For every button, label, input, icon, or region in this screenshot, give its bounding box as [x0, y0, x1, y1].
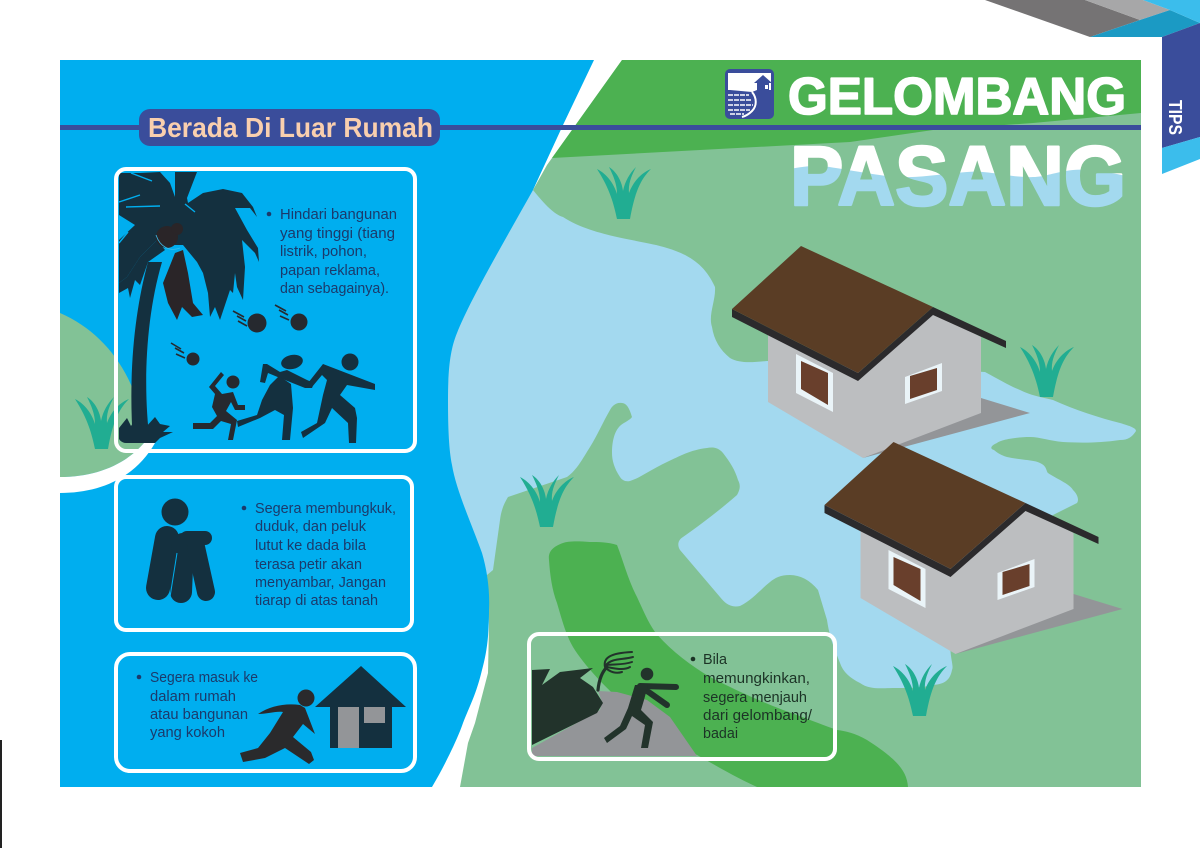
ribbon: top right corner — [985, 0, 1200, 37]
text: move away from waves: dari gelombang/ — [703, 707, 813, 724]
water — [440, 190, 1136, 688]
box outline — [116, 654, 415, 771]
dark green hill — [552, 60, 1141, 158]
text: enter sturdy building: atau bangunan — [150, 706, 248, 723]
text: crouch from lightning: lutut ke dada bila — [255, 537, 367, 554]
house: back — [732, 246, 1030, 458]
icon: tidal wave logo — [725, 69, 774, 119]
box outline — [116, 477, 412, 630]
panel: landscape — [440, 60, 1141, 787]
panel: left blue — [60, 60, 594, 787]
tab label: TIPS — [1165, 100, 1185, 135]
text: move away from waves — [691, 651, 813, 742]
grass: left hill — [75, 397, 129, 449]
text: enter sturdy building: dalam rumah — [150, 688, 236, 705]
icon: house — [315, 666, 406, 748]
text: enter sturdy building: Segera masuk ke — [150, 669, 258, 686]
band — [60, 125, 1141, 130]
text: avoid tall structures: dan sebagainya). — [280, 280, 389, 297]
text: avoid tall structures: papan reklama, — [280, 262, 380, 279]
text: crouch from lightning: Segera membungkuk, — [255, 500, 396, 517]
text: avoid tall structures: listrik, pohon, — [280, 243, 367, 260]
text: move away from waves: segera menjauh — [703, 689, 807, 706]
heading: berada di luar rumah: Berada Di Luar Rumah — [148, 112, 433, 143]
text: move away from waves: Bila — [703, 651, 728, 668]
grass: top — [597, 167, 651, 219]
text: crouch from lightning — [242, 500, 396, 609]
panel: enter sturdy building — [116, 654, 415, 771]
icon: bent palm — [598, 652, 633, 690]
grass: right — [1020, 345, 1074, 397]
box outline — [116, 169, 415, 451]
left hill — [60, 313, 155, 493]
icon: running person — [240, 690, 315, 764]
panel: avoid tall structures — [116, 169, 415, 451]
icon: falling coconuts — [171, 305, 308, 366]
grass: middle — [520, 475, 574, 527]
text: move away from waves: badai — [703, 725, 738, 742]
text: crouch from lightning: terasa petir akan — [255, 556, 362, 573]
text: avoid tall structures: yang tinggi (tiang — [280, 225, 395, 242]
panel: crouch from lightning — [116, 477, 412, 630]
tab: tips — [1162, 23, 1200, 174]
icon: fleeing person — [604, 668, 676, 748]
text: crouch from lightning: duduk, dan peluk — [255, 518, 366, 535]
text: move away from waves: memungkinkan, — [703, 670, 810, 687]
text: enter sturdy building — [137, 669, 258, 741]
box outline — [529, 634, 835, 759]
icon: wave — [532, 668, 603, 745]
panel: move away from waves — [529, 634, 835, 759]
dark green path — [549, 541, 908, 787]
text: avoid tall structures: Hindari bangunan — [280, 206, 397, 223]
text: crouch from lightning: tiarap di atas tanah — [255, 592, 378, 609]
text: crouch from lightning: menyambar, Jangan — [255, 574, 386, 591]
land — [460, 60, 1141, 787]
icon: crouching person — [158, 498, 206, 597]
title: gelombang: GELOMBANG — [788, 68, 1126, 126]
text: enter sturdy building: yang kokoh — [150, 724, 225, 741]
scan edge line — [0, 740, 2, 848]
icon: running people — [193, 353, 375, 443]
text: avoid tall structures — [267, 206, 397, 297]
grass: bottom — [893, 664, 947, 716]
icon: coconut palm — [119, 172, 259, 443]
icon: road — [532, 691, 697, 756]
house: front — [824, 442, 1122, 654]
title: pasang: PASANG — [790, 129, 1126, 223]
